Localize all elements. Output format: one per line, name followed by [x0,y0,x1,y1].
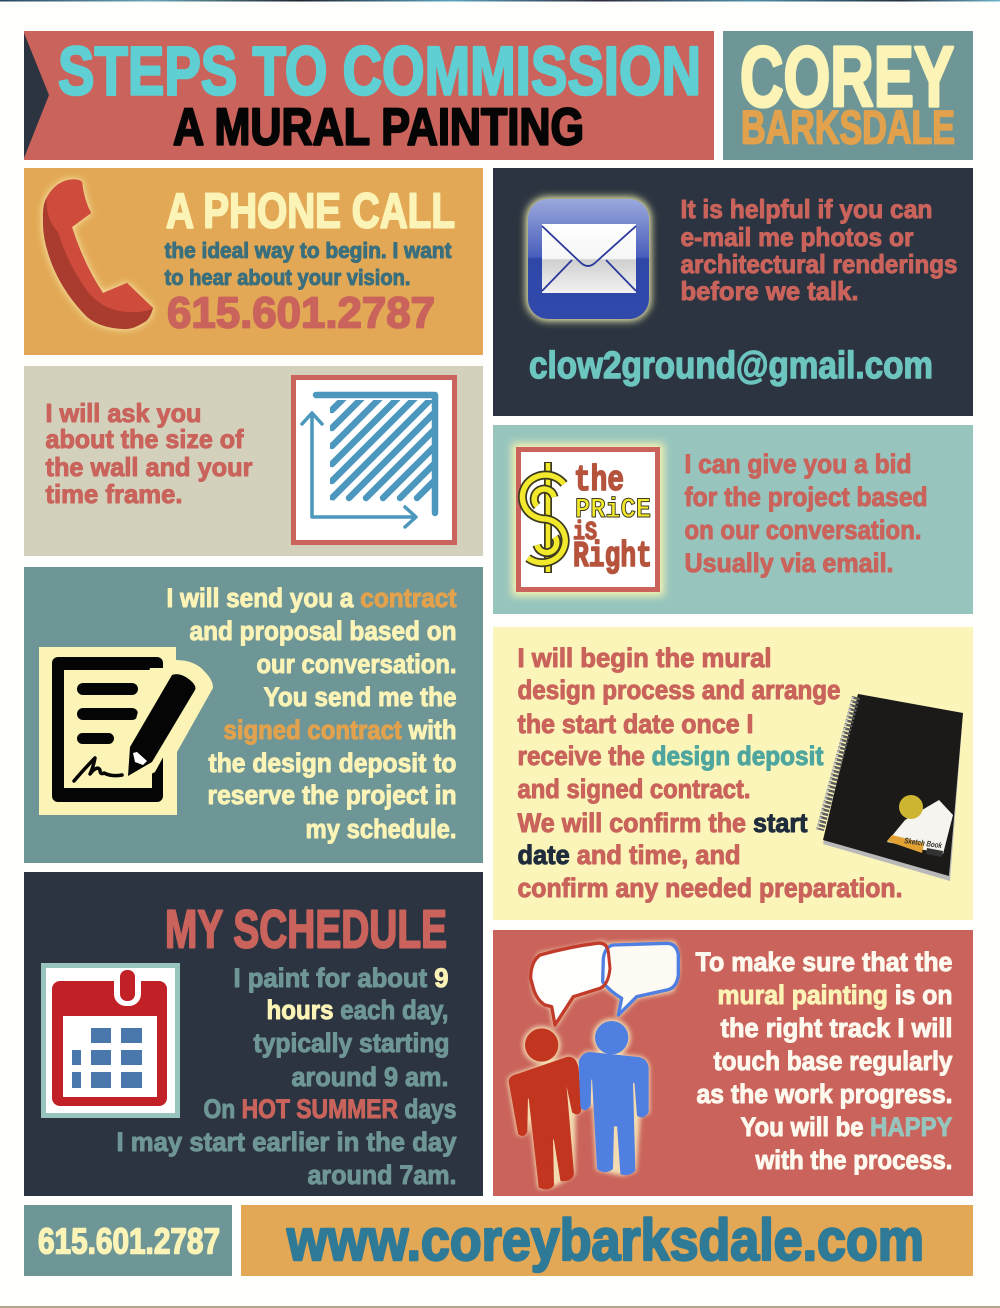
panel: footer website [241,1205,973,1276]
text block: reserve the project in [208,780,456,810]
text block [164,238,452,290]
text block: architectural renderings [680,249,958,279]
text block [518,643,902,903]
panel: staying on track [493,930,973,1196]
icon: price is right logo [512,443,664,596]
text block: about the size of [46,424,244,454]
panel: artist name [723,30,973,160]
panel: footer phone [24,1205,232,1276]
text block [684,449,928,578]
text block: time frame. [46,479,182,509]
text block: On HOT SUMMER days [204,1094,456,1124]
website address: www.coreybarksdale.com [286,1208,924,1273]
panel: phone call [24,168,483,355]
text block [116,963,456,1190]
icon: two people talking [510,943,678,1188]
subtitle: A MURAL PAINTING [173,98,584,156]
panel: email [493,168,973,416]
icon: sketch book [817,694,963,881]
icon: price is right logo: Right [573,536,652,577]
text block: touch base regularly [714,1046,952,1076]
panel: title banner [24,31,714,160]
icon: price is right logo: PRiCE [575,495,651,526]
text block: with the process. [755,1145,952,1175]
text block: mural painting is on [718,980,952,1010]
icon: mail envelope [526,197,651,321]
text block: I will ask you [46,398,202,428]
text block: typically starting [254,1028,450,1058]
text block: and signed contract. [518,774,750,804]
text block: the wall and your [46,452,252,482]
top edge strip [0,0,1000,2]
text block: To make sure that the [696,947,952,977]
text block: as the work progress. [696,1079,952,1109]
text block: my schedule. [306,814,456,844]
bottom edge strip [0,1306,1000,1308]
text block: Usually via email. [684,548,894,578]
text block: I can give you a bid [684,449,912,479]
text block [46,398,252,509]
panel: bid [493,425,973,614]
text block: I will begin the mural [518,643,772,673]
panel: wall size [24,366,483,556]
text block: I may start earlier in the day [116,1127,456,1157]
text block: You send me the [264,682,456,712]
text block: e-mail me photos or [680,222,914,252]
email address: clow2ground@gmail.com [529,345,933,387]
text block: receive the design deposit [518,741,824,771]
text block: the design deposit to [208,748,456,778]
heading: MY SCHEDULE [165,900,447,960]
icon: contract and pencil [39,647,213,815]
text block: around 9 am. [292,1062,448,1092]
icon: banner chevron [24,33,49,158]
icon: telephone handset [43,179,153,329]
text block: and proposal based on [190,616,456,646]
text block: to hear about your vision. [164,265,410,290]
text block [696,947,952,1175]
text block: I will send you a contract [166,583,457,613]
text block: our conversation. [256,649,456,679]
text block: the start date once I [518,709,754,739]
text block: on our conversation. [684,515,922,545]
icon: price is right logo: the [574,460,624,501]
text block: the right track I will [720,1013,952,1043]
text block: confirm any needed preparation. [518,873,902,903]
text block: hours each day, [266,995,448,1025]
icon: price is right logo: iS [573,517,597,547]
title: STEPS TO COMMISSION [58,32,701,110]
icon: sketch book: Sketch Book [904,836,943,850]
text block: I paint for about 9 [234,963,448,993]
panel: contract [24,567,483,863]
panel: design process [493,627,973,920]
text block: the ideal way to begin. I want [164,238,452,263]
text block: It is helpful if you can [680,194,932,224]
phone number: 615.601.2787 [167,288,435,338]
text block [166,583,457,844]
text block: date and time, and [518,840,740,870]
icon: wall dimensions [294,378,454,542]
icon: calendar [44,966,178,1116]
text block: signed contract with [224,715,456,745]
text block: around 7am. [308,1160,456,1190]
heading: A PHONE CALL [166,184,455,238]
phone number: 615.601.2787 [38,1220,220,1262]
text block: We will confirm the start [518,808,808,838]
text block: before we talk. [680,276,858,306]
text block: for the project based [684,482,928,512]
text block [680,194,958,306]
panel: my schedule [24,872,483,1196]
text block: design process and arrange [518,675,840,705]
text block: You will be HAPPY [740,1112,952,1142]
